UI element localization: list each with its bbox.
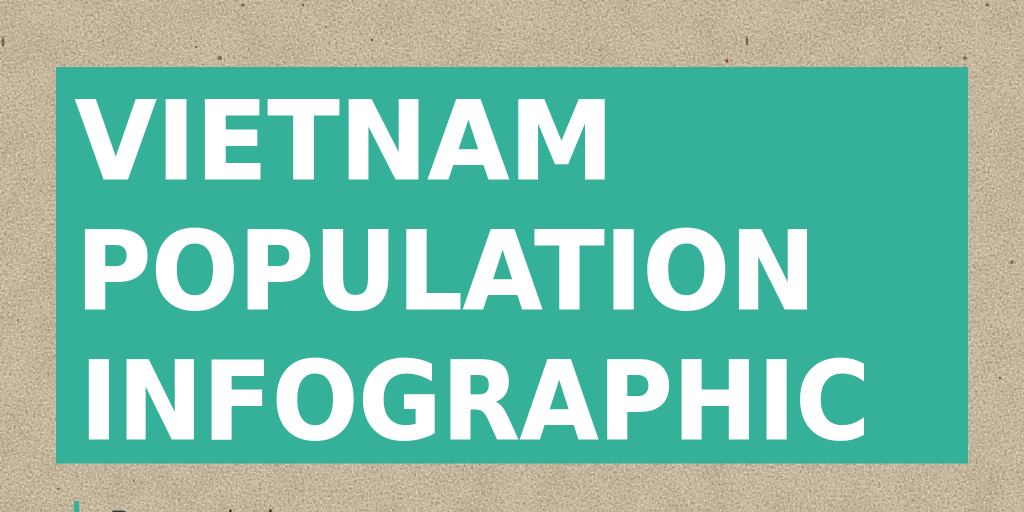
title xyxy=(75,78,870,465)
panel: title background xyxy=(56,67,968,464)
title: POPULATION xyxy=(76,208,816,335)
section marker xyxy=(74,501,79,512)
title: INFOGRAPHIC xyxy=(80,338,870,465)
title: VIETNAM xyxy=(75,78,614,205)
